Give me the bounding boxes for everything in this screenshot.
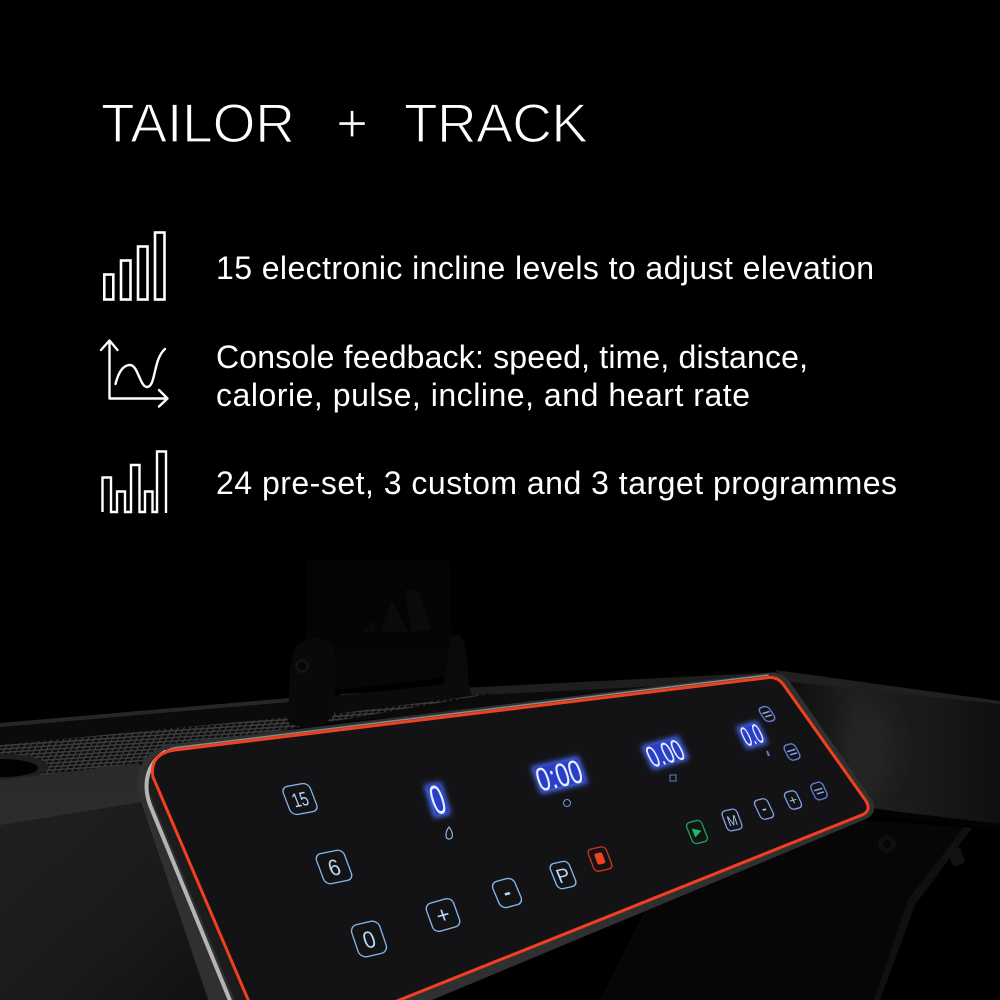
- button plus: [424, 897, 462, 933]
- title: [101, 92, 588, 154]
- display: distance: 0.00: [641, 734, 690, 774]
- icon: heart mark: [767, 751, 769, 756]
- icon: ascending bars: [104, 232, 164, 300]
- button plus: +: [432, 901, 454, 929]
- feature row: programmes: [102, 452, 897, 513]
- button small minus: -: [758, 800, 770, 816]
- button M: [721, 808, 743, 832]
- console chrome trim: [147, 675, 768, 1000]
- feature row: console feedback: [101, 339, 808, 413]
- button small minus: [753, 798, 775, 820]
- button M: M: [725, 812, 740, 830]
- button 0: 0: [359, 925, 379, 954]
- holder hinges: [288, 634, 472, 727]
- button 6: [314, 849, 354, 885]
- console outer bezel: [137, 673, 874, 1000]
- tablet holder: [306, 560, 452, 672]
- title: +: [336, 92, 368, 154]
- button small plus: [783, 790, 803, 810]
- button 15: 15: [288, 787, 312, 812]
- button minus: -: [499, 881, 515, 905]
- right arm: [775, 670, 1000, 830]
- button 6: 6: [324, 854, 344, 881]
- rail behind console: [0, 672, 790, 745]
- text: incline levels: 15 electronic incline levels to adjust elevation: [216, 250, 874, 286]
- preset buttons and controls: [281, 706, 829, 958]
- display: level digit: 0: [424, 778, 452, 824]
- icon button middle: [783, 743, 801, 761]
- button stop: [587, 846, 613, 872]
- icon button upper: [758, 706, 776, 722]
- icon button lower: [809, 781, 829, 801]
- console dark inner trim: [146, 676, 866, 1000]
- icon: line graph: [101, 340, 168, 406]
- cup holder: [0, 754, 48, 780]
- speaker mesh: [0, 692, 500, 780]
- display: pulse: 0.0: [735, 717, 768, 752]
- console glass panel with red line: [152, 677, 868, 1000]
- treadmill console photo illustration: [0, 560, 1000, 1000]
- icon: drop: [446, 827, 452, 839]
- text: programmes: 24 pre-set, 3 custom and 3 target programmes: [216, 465, 897, 501]
- button small plus: +: [786, 791, 800, 808]
- button P: P: [553, 864, 574, 888]
- button play: [685, 819, 709, 845]
- feature row: incline levels: [104, 232, 874, 300]
- button minus: [491, 877, 523, 909]
- support strut: [600, 820, 972, 1000]
- text: console feedback: Console feedback: speed, time, distance,: [216, 339, 808, 375]
- button 15: [281, 783, 319, 815]
- title: TRACK: [404, 92, 588, 154]
- title: TAILOR: [101, 92, 295, 154]
- text: console feedback: calorie, pulse, incline, and heart rate: [216, 377, 750, 413]
- base body: [0, 763, 240, 1000]
- button P: [548, 860, 578, 890]
- icon: distance: [670, 775, 676, 781]
- button 0: [350, 920, 388, 958]
- display: time: 0:00: [531, 754, 588, 799]
- icon: program bars: [102, 452, 166, 513]
- text: console feedback: [216, 339, 808, 413]
- icon: clock: [564, 800, 570, 806]
